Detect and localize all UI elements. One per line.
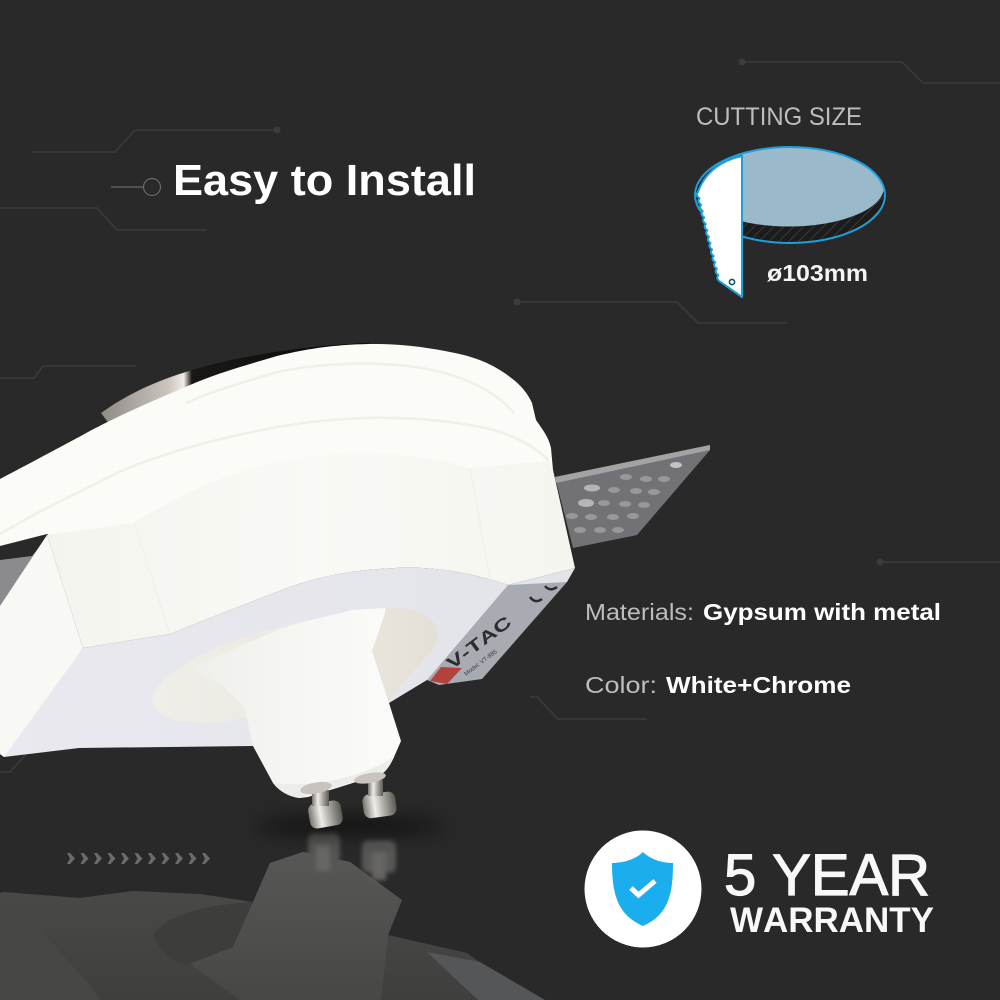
recess hole bbox=[152, 608, 437, 723]
background circuit lines bbox=[0, 58, 1000, 772]
warranty text: 5 YEAR bbox=[724, 843, 930, 908]
metal plate right bbox=[555, 445, 710, 548]
infographic canvas: White+Chrome bbox=[666, 672, 851, 698]
metal plate left bbox=[0, 540, 45, 610]
warranty badge icon bbox=[584, 830, 702, 948]
infographic canvas: Gypsum with metal bbox=[703, 599, 941, 625]
bottom face bbox=[0, 568, 575, 757]
arrow row: chevrons bbox=[67, 853, 210, 864]
GU10 pins bbox=[299, 770, 398, 830]
spec: color: Color: bbox=[585, 672, 657, 698]
icon: saw cutting circular hole bbox=[694, 147, 885, 297]
rating label: Model: VT-885 bbox=[464, 649, 499, 678]
heading marker: line and ring bbox=[111, 178, 160, 196]
chrome trim behind rim bbox=[101, 343, 380, 425]
left side face bbox=[0, 535, 83, 757]
rating label: V-TAC bbox=[443, 612, 515, 673]
rim: outer top band bbox=[0, 344, 560, 560]
warranty text: WARRANTY bbox=[730, 901, 934, 940]
contact shadow under pins bbox=[255, 820, 445, 832]
diameter label: ø103mm bbox=[767, 260, 868, 286]
warranty text bbox=[724, 843, 934, 940]
product reflection bbox=[0, 833, 545, 1000]
spec: materials: Materials: bbox=[585, 599, 694, 625]
rim groove shading bbox=[0, 364, 549, 534]
rating label bbox=[427, 582, 567, 685]
cutting size heading: CUTTING SIZE bbox=[696, 103, 862, 131]
title: Easy to Install bbox=[173, 156, 476, 205]
product photo: gypsum GU10 fitting bbox=[0, 343, 710, 830]
front wall bbox=[47, 453, 575, 648]
lamp holder tube bbox=[190, 608, 401, 798]
